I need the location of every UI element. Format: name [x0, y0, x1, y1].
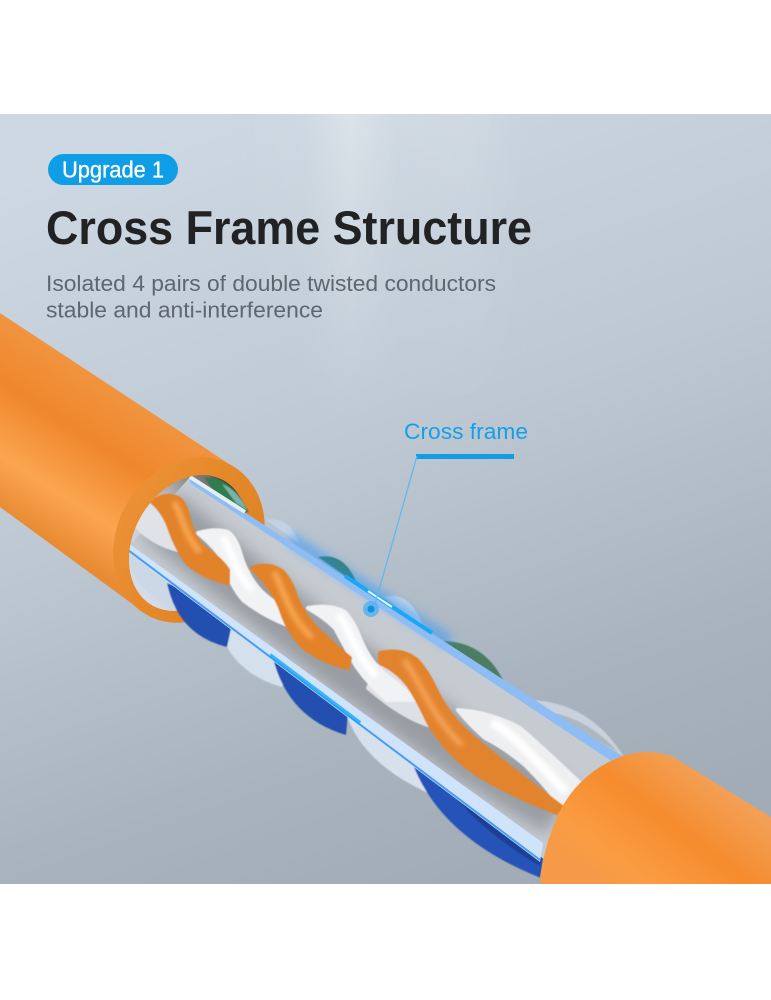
- description text: Isolated 4 pairs of double twisted conductors: [46, 271, 496, 296]
- infographic canvas: [0, 114, 771, 884]
- cable interior emerging from jacket: [128, 477, 630, 878]
- description text: stable and anti-interference: [46, 298, 323, 322]
- upper frame edge: [190, 477, 623, 764]
- white conductor segments: [137, 503, 178, 550]
- upper frame edge glow: [290, 538, 450, 642]
- background panel: [0, 114, 771, 884]
- wire shadow on plate: [160, 515, 560, 810]
- twisted pair: white and orange conductors: [137, 496, 580, 813]
- callout: Cross frame: [363, 419, 528, 617]
- heading badge: Upgrade 1: [48, 154, 178, 185]
- description text: [46, 271, 496, 322]
- lower frame edge: [128, 543, 543, 862]
- wire lobes above the frame: [205, 478, 624, 757]
- left cable jacket: [0, 313, 294, 650]
- heading badge: Upgrade 1: Upgrade 1: [62, 156, 164, 182]
- orange highlights: [174, 502, 200, 552]
- cross frame plate: [128, 477, 630, 862]
- orange conductor segments: [152, 496, 228, 583]
- wire lobes below the frame: [128, 552, 545, 878]
- callout: Cross frame: Cross frame: [404, 419, 528, 444]
- right cable jacket: [540, 752, 771, 884]
- title: Cross Frame Structure: [46, 201, 532, 254]
- white highlights: [222, 537, 252, 590]
